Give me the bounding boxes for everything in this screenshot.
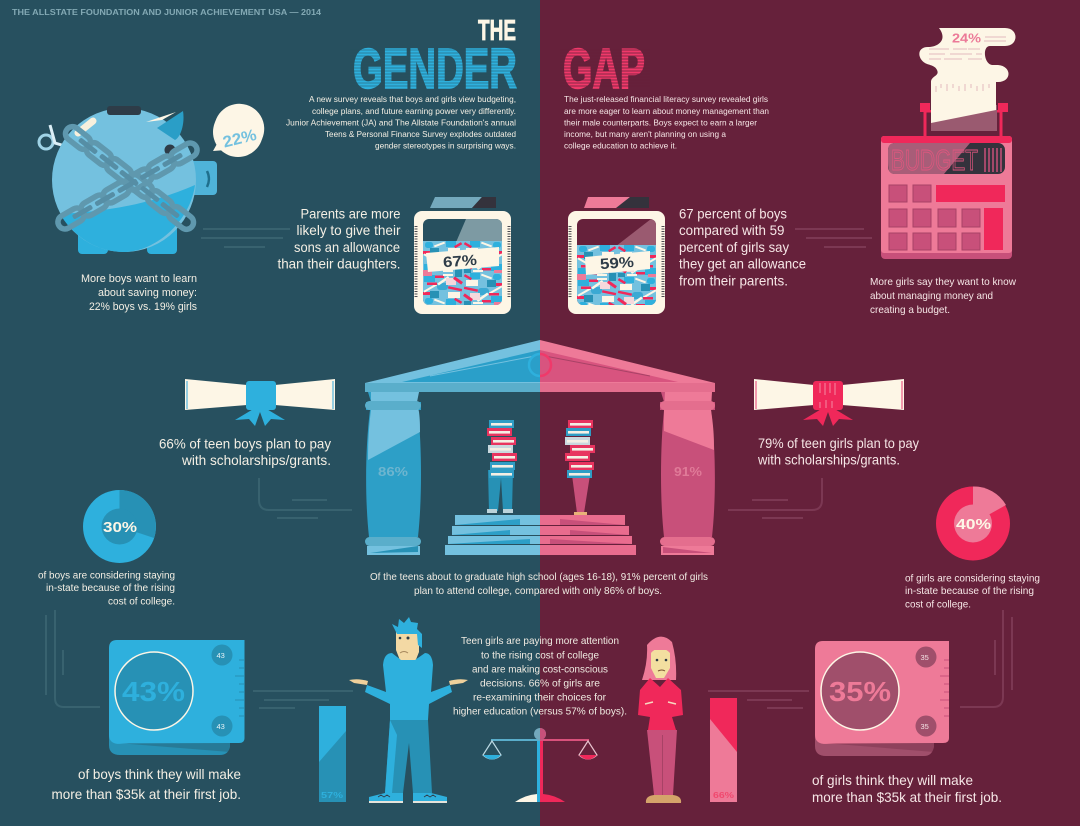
column: 91%: 91%: [674, 464, 702, 479]
text: girls scholarships: [757, 435, 919, 468]
student boy with books: [487, 420, 517, 513]
text: girls in-state: [905, 574, 1040, 610]
title: [350, 15, 650, 101]
bar: girls 66%: 66%: [713, 790, 735, 800]
card: girls 35%: 35%: [829, 676, 891, 707]
text: boys in-state: of boys are considering staying: [38, 570, 175, 582]
text: saving money: about saving money:: [98, 287, 197, 299]
text: boys in-state: in-state because of the rising: [46, 583, 175, 594]
text: allowance statistic: from their parents.: [679, 272, 788, 288]
icon: budget calculator: [881, 28, 1016, 259]
bottom decorative lines: [46, 610, 353, 708]
text: allowance statistic: compared with 59: [679, 222, 785, 238]
text: boys in-state: [38, 570, 175, 608]
card: boys 43%: 43: [216, 651, 225, 660]
intro text: boys side: gender stereotypes in surprising ways.: [375, 140, 516, 150]
text: budget caption: creating a budget.: [870, 304, 950, 316]
intro text: boys side: A new survey reveals that boys and girls view budgeting,: [309, 94, 516, 104]
intro text: girls side: [564, 94, 769, 150]
text: saving money: More boys want to learn: [81, 273, 197, 285]
intro text: boys side: Junior Achievement (JA) and The Allstate Foundation's annual: [286, 118, 516, 128]
intro text: boys side: Teens & Personal Finance Survey explodes outdated: [325, 129, 516, 139]
text: girls in-state: in-state because of the rising: [905, 586, 1034, 597]
text: cost-conscious: to the rising cost of college: [481, 650, 599, 662]
intro text: girls side: income, but many aren't planning on using a: [564, 129, 726, 139]
text: girls first job: of girls think they will make: [812, 772, 973, 788]
icon: diploma girls: [754, 379, 904, 426]
icon: jar 59%: 59%: [599, 254, 635, 273]
text: cost-conscious: re-examining their choices for: [473, 692, 607, 704]
figure: girl with crossed arms: [638, 637, 683, 803]
text: boys first job: [52, 766, 241, 802]
text: college caption: [370, 571, 708, 597]
text: boys first job: of boys think they will make: [78, 766, 241, 782]
icon: diploma boys: [185, 379, 335, 426]
bar: boys 57%: 57%: [321, 790, 344, 800]
column: 86%: [365, 392, 421, 555]
card: girls 35%: 35: [920, 722, 929, 731]
text: budget caption: [870, 276, 1016, 316]
text: cost-conscious: [453, 636, 627, 718]
card: boys 43%: 43: [216, 722, 225, 731]
source line: THE ALLSTATE FOUNDATION AND JUNIOR ACHIEVEMENT USA — 2014: [12, 8, 322, 17]
text: girls in-state: of girls are considering staying: [905, 574, 1040, 584]
title: GENDER: [353, 37, 517, 101]
card: boys 43%: 43%: [122, 676, 185, 707]
text: allowance statistic: percent of girls say: [679, 239, 789, 255]
text: cost-conscious: decisions. 66% of girls are: [480, 678, 600, 690]
text: girls in-state: cost of college.: [905, 600, 971, 610]
intro text: girls side: are more eager to learn about money management than: [564, 106, 769, 116]
piggy speed lines: [201, 229, 290, 247]
title: THE: [478, 15, 516, 47]
text: allowance statistic: 67 percent of boys: [679, 206, 787, 222]
intro text: girls side: The just-released financial literacy survey revealed girls: [564, 94, 768, 104]
donut: girls 40%: 40%: [956, 516, 991, 533]
text: cost-conscious: higher education (versus 57% of boys).: [453, 706, 627, 718]
text: cost-conscious: Teen girls are paying more attention: [461, 636, 619, 647]
steps: [445, 515, 636, 555]
text: boys in-state: cost of college.: [108, 596, 175, 608]
text: boys scholarships: [159, 436, 331, 468]
donut: boys 30%: 30%: [103, 519, 137, 536]
bar: girls 66%: [710, 698, 737, 802]
text: saving money: 22% boys vs. 19% girls: [89, 301, 197, 313]
donut: girls 40%: [936, 486, 1010, 560]
icon: chained piggy bank: [39, 106, 217, 254]
intro text: girls side: college education to achieve it.: [564, 140, 677, 150]
text: allowance statistic: [679, 206, 806, 288]
text: boys first job: more than $35k at their first job.: [52, 786, 241, 802]
text: girls first job: more than $35k at their first job.: [812, 789, 1002, 805]
text: budget caption: about managing money and: [870, 290, 993, 302]
text: girls scholarships: 79% of teen girls plan to pay: [758, 435, 919, 451]
text: parents allowance: Parents are more: [300, 206, 401, 222]
text: parents allowance: than their daughters.: [278, 256, 400, 272]
temple roof: [365, 340, 715, 392]
text: girls scholarships: with scholarships/grants.: [757, 452, 900, 468]
text: girls first job: [812, 772, 1002, 805]
title: GAP: [563, 37, 645, 101]
text: parents allowance: [278, 206, 401, 272]
text: saving money: [81, 273, 197, 313]
intro text: girls side: their male counterparts. Boys expect to earn a larger: [564, 118, 757, 128]
text: college caption: Of the teens about to graduate high school (ages 16-18), 91% percent of girls: [370, 571, 708, 583]
background: boys half: [0, 0, 540, 826]
text: budget caption: More girls say they want to know: [870, 276, 1016, 288]
text: allowance statistic: they get an allowance: [679, 256, 806, 272]
figure: shrugging boy: [349, 617, 468, 803]
text: parents allowance: likely to give their: [296, 222, 401, 238]
temple: [365, 340, 715, 555]
text: cost-conscious: and are making cost-conscious: [472, 664, 608, 676]
donut: boys 30%: [83, 490, 156, 563]
column: 91%: [660, 392, 715, 555]
icon: budget calculator: BUDGET: [891, 145, 978, 177]
icon: balance scale: [483, 728, 597, 802]
callout: 22% speech bubble: 22%: [221, 127, 258, 152]
background: girls half: [540, 0, 1080, 826]
card: girls 35%: [815, 641, 949, 756]
bracket deco: girls: [728, 478, 822, 518]
text: parents allowance: sons an allowance: [294, 239, 400, 255]
icon: budget calculator: 24%: [952, 30, 981, 46]
student girl with books: [565, 420, 595, 515]
icon: jar 67%: [414, 197, 511, 314]
text: boys scholarships: 66% of teen boys plan to pay: [159, 436, 331, 452]
intro text: boys side: [286, 94, 516, 150]
callout: 22% speech bubble: [213, 104, 264, 157]
card: girls 35%: 35: [920, 653, 929, 662]
card: boys 43%: [109, 640, 244, 755]
icon: jar 59%: [568, 197, 665, 314]
intro text: boys side: college plans, and future earning power very differently.: [312, 106, 516, 116]
bracket deco: boys: [259, 478, 352, 518]
bar: boys 57%: [319, 706, 346, 802]
icon: jar 67%: 67%: [442, 252, 478, 271]
text: boys scholarships: with scholarships/grants.: [181, 452, 331, 468]
column: 86%: 86%: [378, 464, 408, 479]
text: college caption: plan to attend college, compared with only 86% of boys.: [414, 585, 662, 597]
calculator speed lines: [795, 229, 872, 247]
